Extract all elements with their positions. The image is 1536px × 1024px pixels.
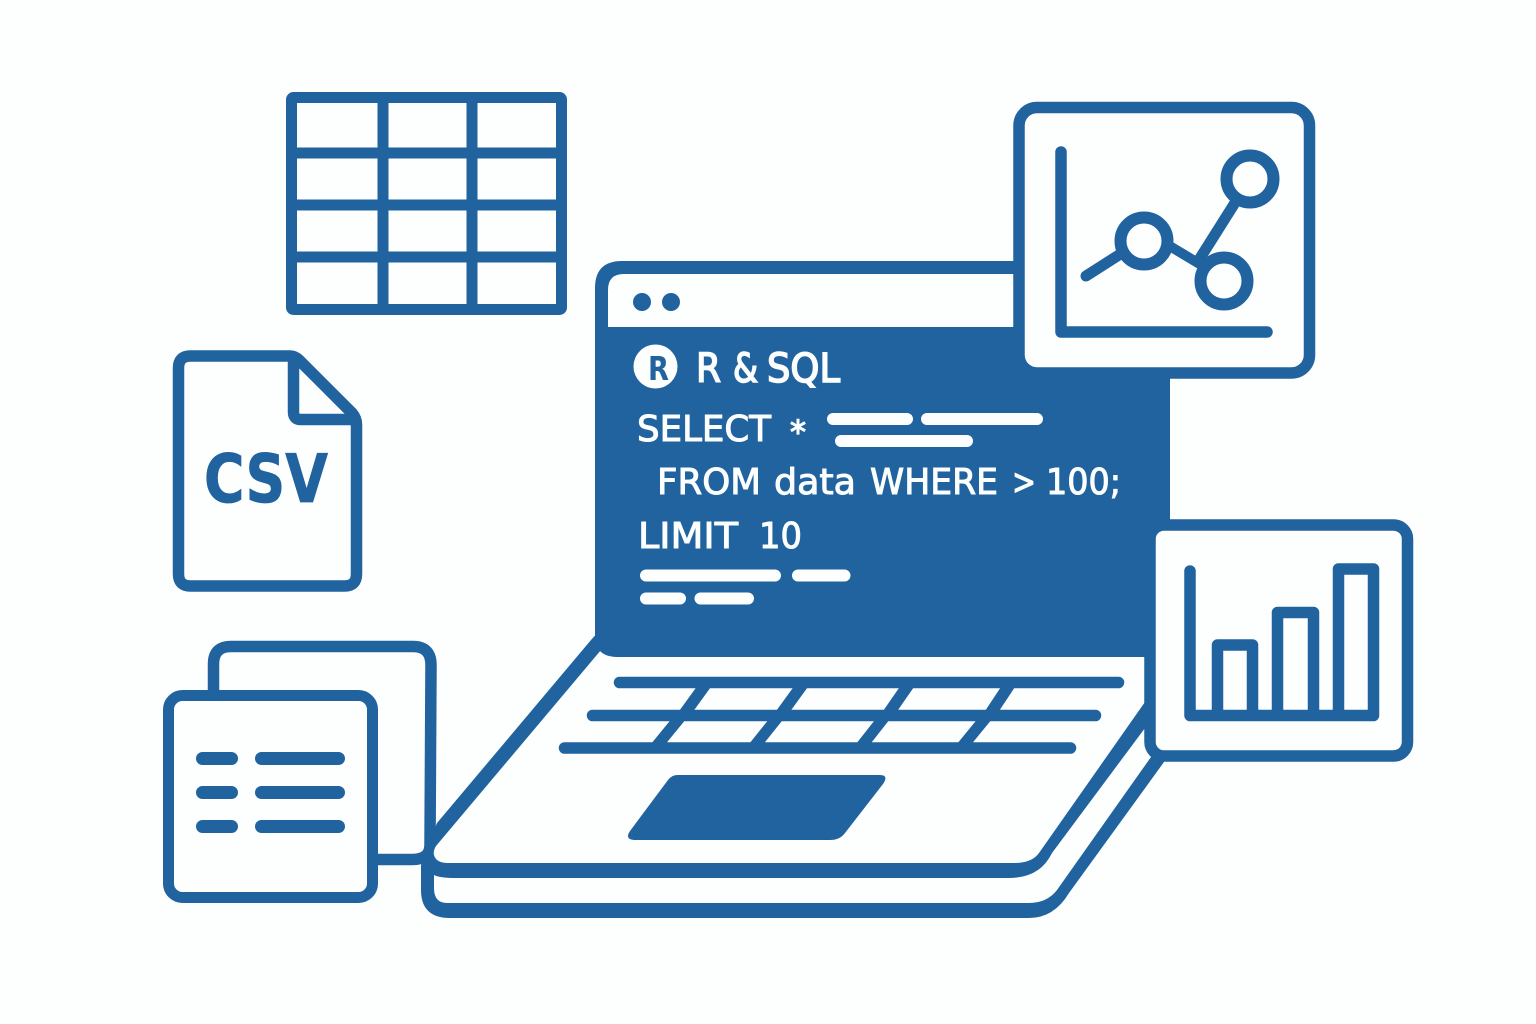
code lines: > — [1012, 462, 1036, 503]
window dots — [633, 293, 680, 311]
bar chart card — [1150, 525, 1408, 756]
placeholder code strokes — [646, 419, 1037, 598]
code window — [595, 261, 1170, 657]
code lines: WHERE — [870, 462, 998, 503]
window title — [696, 346, 841, 392]
icon: stacked documents — [168, 646, 431, 898]
code lines — [637, 409, 1121, 557]
icon: spreadsheet table — [291, 97, 562, 310]
laptop — [421, 261, 1170, 918]
line chart card — [1019, 108, 1310, 373]
CSV label: CSV — [204, 440, 328, 518]
code lines: data — [774, 462, 856, 503]
code lines: FROM — [657, 462, 761, 503]
window title: R — [696, 346, 721, 392]
R logo — [634, 344, 678, 388]
code lines: * — [790, 413, 806, 451]
R logo: R — [648, 349, 669, 388]
keyboard — [564, 682, 1118, 748]
code lines: 10 — [759, 516, 802, 557]
window title: & — [733, 346, 758, 392]
trackpad — [628, 775, 885, 840]
code lines: LIMIT — [638, 516, 739, 557]
code lines: SELECT — [637, 409, 772, 450]
icon: CSV file — [178, 356, 356, 586]
code lines: 100; — [1046, 462, 1121, 503]
window title: SQL — [767, 346, 841, 392]
laptop base — [421, 630, 1164, 918]
